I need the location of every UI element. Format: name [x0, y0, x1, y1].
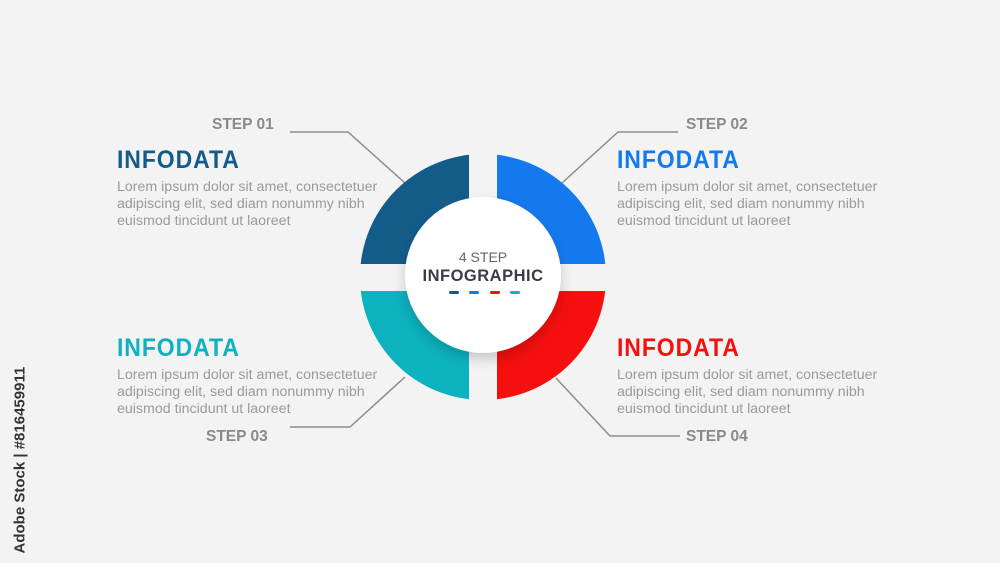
text: adipiscing elit, sed diam nonummy nibh: [117, 384, 365, 400]
text: STEP 03: [206, 428, 268, 445]
text: STEP 02: [686, 116, 748, 133]
text: Lorem ipsum dolor sit amet, consectetuer: [617, 179, 877, 195]
text: adipiscing elit, sed diam nonummy nibh: [617, 196, 865, 212]
text: euismod tincidunt ut laoreet: [117, 401, 291, 417]
text: Lorem ipsum dolor sit amet, consectetuer: [617, 367, 877, 383]
text: euismod tincidunt ut laoreet: [617, 401, 791, 417]
quadrant 3: [360, 291, 469, 400]
quadrant 1: [360, 154, 469, 264]
quadrant 2: [497, 154, 606, 264]
text: adipiscing elit, sed diam nonummy nibh: [617, 384, 865, 400]
quadrant 4: [497, 291, 606, 400]
center circle: INFOGRAPHIC: [422, 267, 544, 285]
block 1: INFODATA: [117, 146, 240, 174]
text: euismod tincidunt ut laoreet: [617, 213, 791, 229]
block 4: INFODATA: [617, 334, 740, 362]
text: STEP 04: [686, 428, 748, 445]
block 3: INFODATA: [117, 334, 240, 362]
text: Lorem ipsum dolor sit amet, consectetuer: [117, 367, 377, 383]
text: adipiscing elit, sed diam nonummy nibh: [117, 196, 365, 212]
text: Lorem ipsum dolor sit amet, consectetuer: [117, 179, 377, 195]
step labels: STEP 01: [212, 116, 274, 133]
block 2: INFODATA: [617, 146, 740, 174]
center circle: [405, 197, 561, 353]
center circle: 4 STEP: [459, 249, 507, 265]
text: euismod tincidunt ut laoreet: [117, 213, 291, 229]
connector lines: [290, 132, 680, 436]
diagram: [290, 131, 680, 437]
watermark id: Adobe Stock | #816459911: [12, 367, 28, 554]
